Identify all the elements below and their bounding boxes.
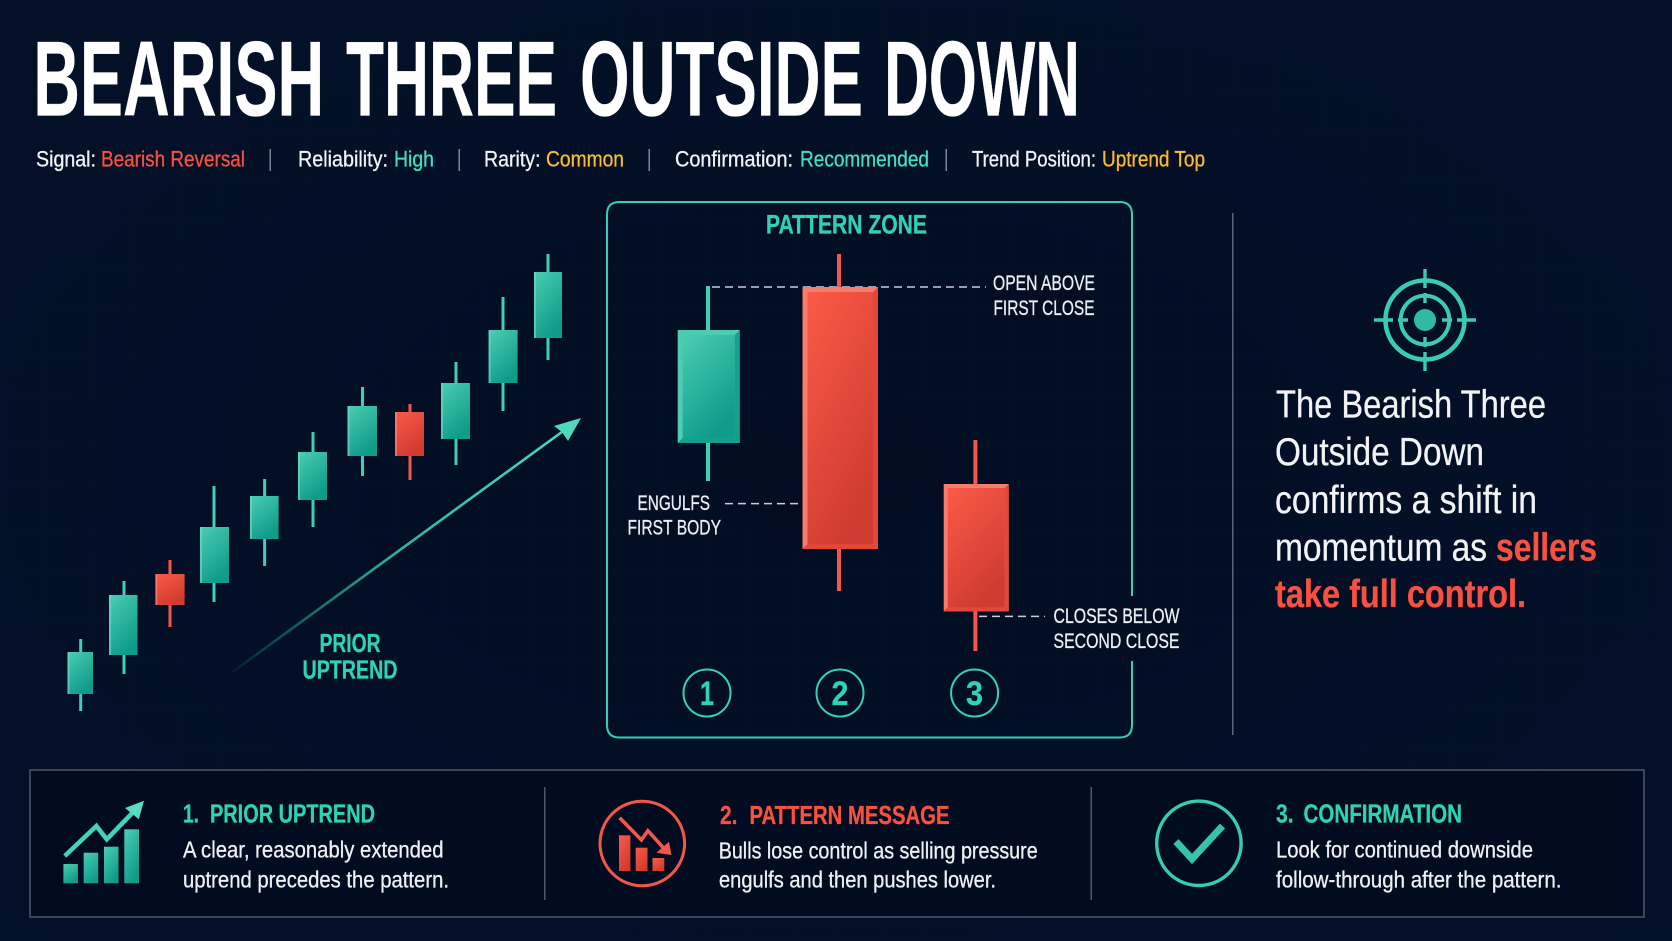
summary text: The Bearish Three — [1276, 384, 1546, 426]
step marker 3: 3 — [966, 675, 983, 713]
summary text: sellers — [1496, 526, 1597, 570]
takeaway 2: pattern message — [600, 800, 1038, 893]
attribute: signal: Signal: — [36, 146, 96, 172]
attribute: rarity: Rarity: — [484, 146, 540, 172]
icon: target — [1374, 269, 1476, 371]
label: prior uptrend — [302, 628, 398, 684]
chart: prior uptrend candles — [68, 254, 562, 711]
icon: rising bars with arrow — [63, 801, 144, 883]
heading — [1276, 799, 1462, 829]
description — [719, 837, 1038, 893]
candle 6 — [298, 432, 327, 527]
candle 7 — [348, 387, 377, 476]
heading: 2. — [720, 800, 738, 830]
candle 8 — [395, 404, 424, 480]
heading: 3. — [1276, 799, 1294, 829]
candle 2 — [109, 581, 138, 674]
step marker 1 — [684, 670, 730, 716]
candle 4 — [200, 486, 229, 602]
heading: PRIOR UPTREND — [210, 799, 375, 829]
attribute: signal — [36, 146, 245, 172]
icon: check mark — [1157, 801, 1241, 886]
attribute: trend position: Uptrend Top — [1102, 146, 1205, 172]
annotation: closes below second close — [979, 605, 1180, 653]
attribute: signal: Bearish Reversal — [101, 146, 245, 172]
title — [33, 18, 1080, 138]
pattern candle 3 — [944, 440, 1009, 651]
summary text — [1275, 384, 1597, 616]
label: prior uptrend: UPTREND — [302, 654, 398, 684]
annotation: closes below second close: CLOSES BELOW — [1054, 605, 1180, 628]
description: A clear, reasonably extended — [183, 837, 444, 863]
heading: 1. — [183, 799, 199, 829]
summary text: momentum as — [1275, 526, 1487, 570]
attribute: confirmation — [675, 146, 929, 172]
pattern zone frame — [607, 202, 1132, 738]
summary text: confirms a shift in — [1275, 479, 1537, 522]
summary text: take full control. — [1275, 573, 1526, 616]
title: THREE — [346, 18, 557, 138]
description: engulfs and then pushes lower. — [719, 867, 996, 893]
description — [183, 837, 449, 892]
dashed guide: open above first close — [712, 286, 986, 288]
heading: pattern zone: PATTERN ZONE — [766, 210, 927, 240]
icon: falling bars with arrow — [600, 801, 685, 886]
annotation: open above first close: FIRST CLOSE — [994, 297, 1094, 320]
title: OUTSIDE — [580, 18, 863, 138]
step marker 3 — [951, 670, 998, 716]
arrow: prior uptrend — [231, 418, 581, 673]
heading — [183, 799, 375, 829]
pattern candle 2 — [802, 254, 878, 591]
step marker 2 — [816, 670, 864, 716]
candle 11 — [534, 254, 562, 360]
takeaway 3: confirmation — [1157, 799, 1562, 892]
annotation: engulfs first body: ENGULFS — [638, 492, 710, 515]
title: DOWN — [884, 18, 1080, 138]
pattern candle 1 — [678, 286, 740, 481]
annotation: engulfs first body: FIRST BODY — [628, 516, 721, 540]
candle 9 — [441, 362, 470, 465]
description — [1276, 837, 1562, 892]
candle 3 — [155, 560, 185, 627]
step marker 1: 1 — [700, 675, 714, 713]
takeaway 1: prior uptrend — [63, 799, 449, 892]
description: Bulls lose control as selling pressure — [719, 837, 1038, 863]
annotation: engulfs first body — [628, 492, 801, 540]
description: follow-through after the pattern. — [1276, 866, 1562, 892]
candle 1 — [68, 639, 93, 711]
attribute: reliability: High — [394, 146, 434, 172]
summary text: Outside Down — [1275, 431, 1484, 474]
annotation: closes below second close: SECOND CLOSE — [1054, 630, 1180, 653]
step marker 2: 2 — [832, 675, 848, 713]
attribute: trend position — [972, 146, 1205, 172]
panel: pattern zone — [607, 202, 1180, 738]
description: uptrend precedes the pattern. — [183, 866, 449, 892]
attribute: reliability: Reliability: — [298, 146, 388, 172]
panel: key takeaways — [30, 770, 1644, 917]
description: Look for continued downside — [1276, 837, 1533, 863]
candle 5 — [250, 479, 279, 566]
title: BEARISH — [33, 18, 324, 138]
attribute: confirmation: Recommended — [800, 146, 929, 172]
label: prior uptrend: PRIOR — [320, 628, 381, 658]
attribute: rarity — [484, 146, 624, 172]
heading: PATTERN MESSAGE — [750, 800, 950, 830]
annotation: open above first close — [993, 272, 1095, 320]
attribute: trend position: Trend Position: — [972, 146, 1096, 172]
attribute: confirmation: Confirmation: — [675, 146, 793, 172]
heading: CONFIRMATION — [1304, 799, 1462, 829]
attribute strip — [36, 146, 1205, 172]
attribute: rarity: Common — [546, 146, 624, 172]
annotation: open above first close: OPEN ABOVE — [993, 272, 1095, 295]
candle 10 — [489, 297, 518, 411]
